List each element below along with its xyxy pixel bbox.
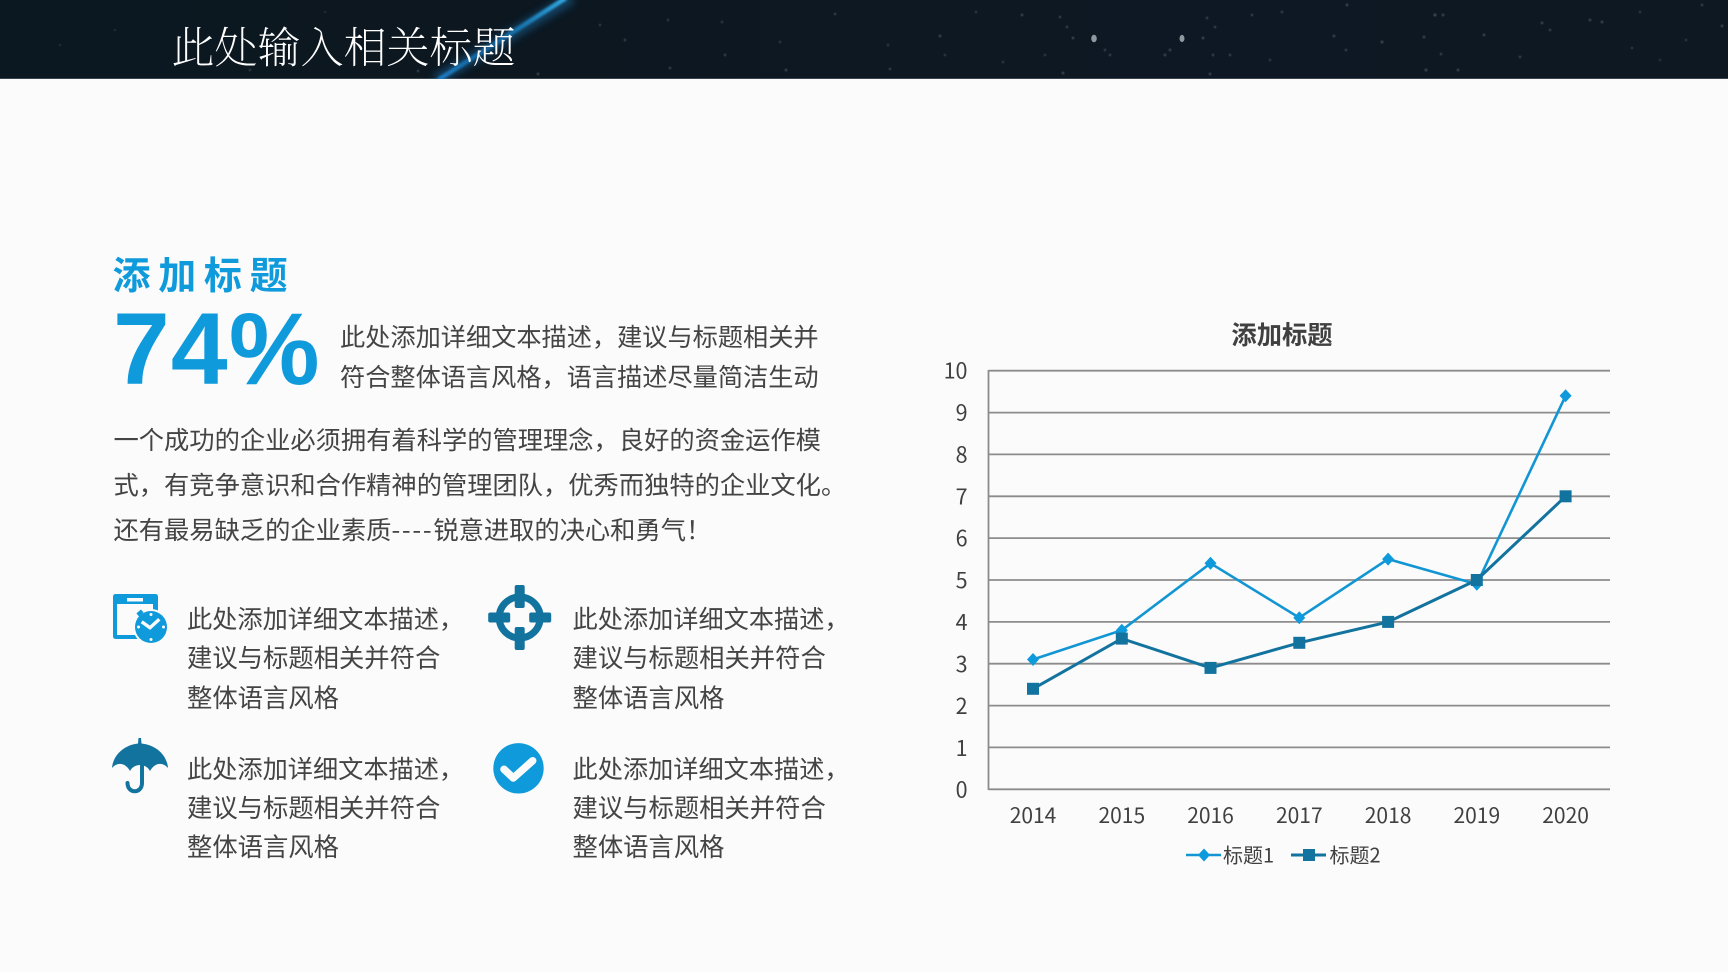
- x axis labels: 2015: [1098, 800, 1145, 830]
- x axis labels: 2014: [1010, 800, 1056, 830]
- body paragraph: [114, 420, 846, 546]
- series 2 line: [1027, 490, 1572, 695]
- text: item 4: 整体语言风格: [572, 828, 724, 864]
- icon: check circle: [493, 743, 544, 794]
- x axis labels: 2020: [1542, 800, 1589, 830]
- header banner: [0, 0, 1728, 79]
- x axis labels: 2016: [1187, 800, 1234, 830]
- text: item 2: [572, 600, 850, 715]
- icon: umbrella: [112, 738, 168, 794]
- y axis labels: 5: [956, 564, 968, 595]
- y axis labels: 6: [956, 522, 968, 553]
- text: item 4: [572, 750, 850, 864]
- text: item 3: 整体语言风格: [187, 828, 339, 864]
- text: item 3: [187, 750, 464, 864]
- icon: crosshair target: [488, 585, 552, 650]
- y axis labels: 10: [944, 354, 968, 386]
- text: item 2: 此处添加详细文本描述，: [572, 600, 850, 636]
- y axis labels: 3: [956, 648, 968, 679]
- y axis labels: 2: [956, 690, 968, 721]
- series 1 line: [1027, 389, 1572, 666]
- text: item 1: 整体语言风格: [187, 679, 339, 715]
- x axis labels: 2018: [1365, 800, 1411, 830]
- x axis labels: [1010, 800, 1589, 830]
- chart title: 添加标题: [1231, 316, 1333, 352]
- text: item 4: 此处添加详细文本描述，: [572, 750, 850, 786]
- y axis labels: 4: [956, 606, 968, 637]
- intro text: [340, 318, 819, 394]
- y axis labels: 1: [956, 732, 968, 763]
- page title: 此处输入相关标题: [172, 15, 516, 76]
- icon: calendar clock: [113, 594, 167, 643]
- y axis labels: 7: [956, 480, 968, 511]
- body paragraph: 式，有竞争意识和合作精神的管理团队，优秀而独特的企业文化。: [114, 466, 846, 502]
- intro text: 此处添加详细文本描述，建议与标题相关并: [340, 318, 819, 354]
- x axis labels: 2019: [1453, 800, 1500, 830]
- section heading: 添加标题: [112, 245, 295, 300]
- body paragraph: 还有最易缺乏的企业素质----锐意进取的决心和勇气！: [114, 510, 711, 546]
- body paragraph: 一个成功的企业必须拥有着科学的管理理念，良好的资金运作模: [114, 420, 821, 456]
- y axis labels: 9: [956, 397, 968, 428]
- legend: 标题2: [1330, 840, 1381, 868]
- line chart: [944, 316, 1610, 868]
- text: item 2: 建议与标题相关并符合: [572, 639, 826, 675]
- legend: [1186, 840, 1381, 868]
- y axis labels: 8: [956, 439, 968, 470]
- y axis labels: [944, 354, 968, 805]
- text: item 3: 建议与标题相关并符合: [187, 788, 440, 824]
- gridlines and axes: [988, 370, 1610, 790]
- x axis labels: 2017: [1276, 800, 1323, 830]
- text: item 2: 整体语言风格: [572, 679, 724, 715]
- y axis labels: 0: [956, 774, 968, 805]
- text: item 1: 建议与标题相关并符合: [187, 639, 440, 675]
- big percentage: 74%: [113, 292, 321, 406]
- legend: 标题1: [1223, 840, 1274, 868]
- text: item 1: [187, 600, 464, 715]
- text: item 3: 此处添加详细文本描述，: [187, 750, 464, 786]
- intro text: 符合整体语言风格，语言描述尽量简洁生动: [340, 358, 819, 394]
- text: item 1: 此处添加详细文本描述，: [187, 600, 464, 636]
- text: item 4: 建议与标题相关并符合: [572, 788, 826, 824]
